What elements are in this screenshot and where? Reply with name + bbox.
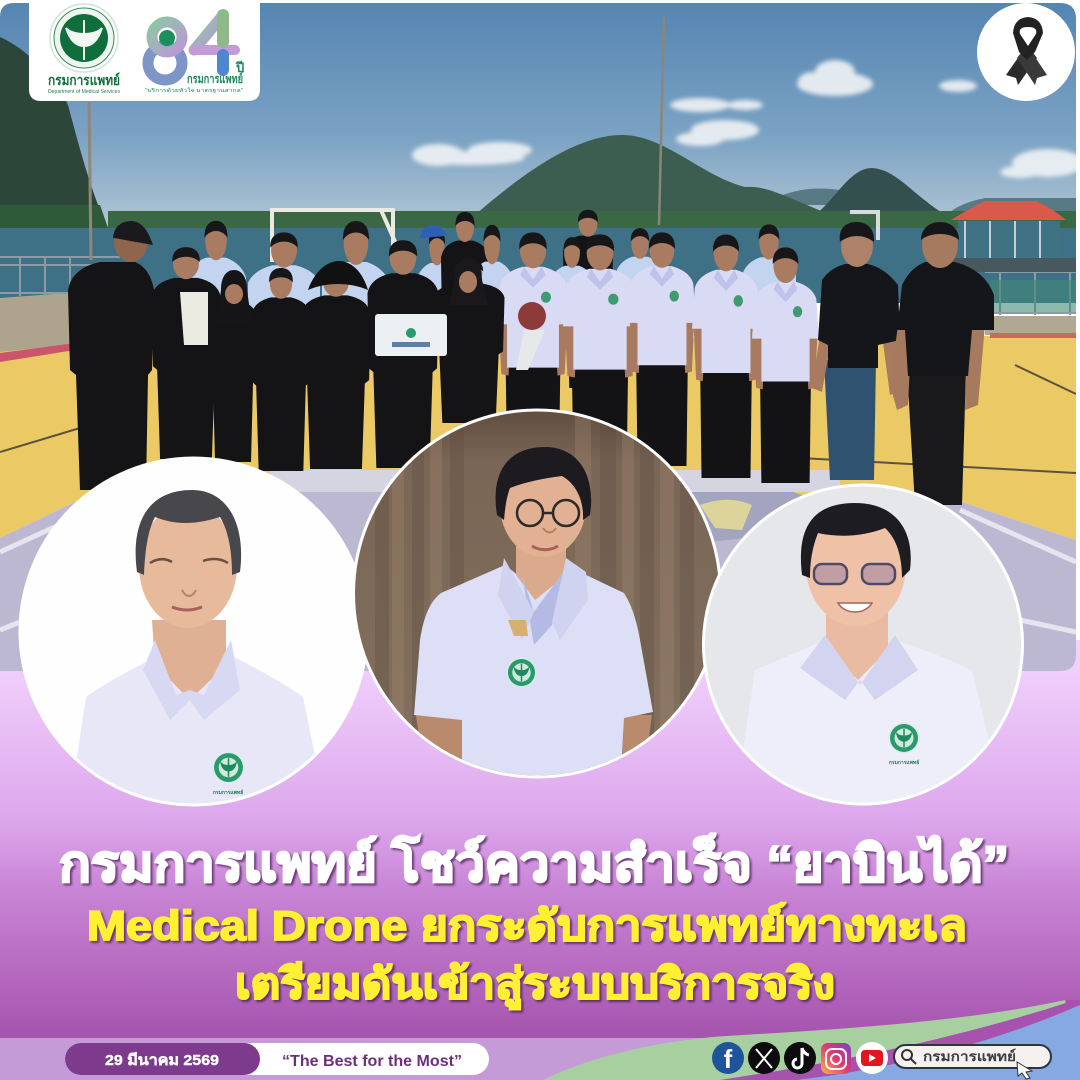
deck floor beneath group: [270, 470, 840, 492]
shirt: [740, 640, 996, 810]
curtain folds: [375, 423, 694, 764]
logo: 84 years: ปี: [235, 60, 244, 75]
icon: Facebook: f: [724, 1044, 733, 1074]
page background gradient: [0, 640, 1080, 1040]
department name: Department of Medical Services: [48, 89, 120, 95]
portrait: left official: [18, 455, 370, 810]
pin: [508, 620, 528, 636]
portrait: right official: [700, 483, 1026, 810]
mourning ribbon badge: [977, 3, 1075, 101]
icon: Facebook: [712, 1042, 744, 1074]
logo: 84 years: “บริการด้วยหัวใจ มาตรฐานสากล”: [145, 87, 243, 94]
icon: Ministry of Public Health seal: [50, 4, 118, 72]
icon: cursor: [1017, 1062, 1032, 1079]
man with black cap: [68, 221, 154, 490]
yellow deck: [0, 335, 1076, 540]
search bar: [894, 1045, 1051, 1079]
helipad lilac: [0, 480, 1076, 671]
department name: [48, 72, 120, 95]
footer band: [0, 1000, 1080, 1080]
shirt: [77, 657, 314, 804]
date and slogan pill: [65, 1043, 489, 1075]
search bar: กรมการแพทย์: [923, 1048, 1016, 1064]
back row of people: [191, 210, 796, 388]
clouds: [412, 60, 1080, 178]
sea: [0, 228, 1080, 303]
icon: X: [748, 1042, 780, 1074]
man with black polo and jeans: [812, 222, 902, 480]
blue wave: [797, 1005, 1080, 1080]
department name: กรมการแพทย์: [48, 72, 120, 88]
bouquet: [516, 302, 546, 370]
front row: black clothes: [68, 221, 505, 490]
purple wave: [720, 1000, 1080, 1080]
poles and goal: [659, 16, 664, 225]
man with black polo and trousers: [890, 222, 994, 505]
white medical box: [375, 314, 447, 356]
tree line: [108, 211, 1076, 228]
social icons: [712, 1042, 888, 1074]
portrait: left official: กรมการแพทย์: [213, 789, 243, 796]
mountains: [783, 188, 1076, 211]
logo: 84 years: [145, 15, 244, 94]
purple wedge above the band: [713, 1000, 1080, 1038]
shirt: [414, 565, 653, 790]
headline: [59, 833, 1009, 1010]
portrait: right official: กรมการแพทย์: [889, 759, 919, 766]
front row: white shirts: [497, 232, 819, 483]
icon: black ribbon: [1006, 17, 1047, 85]
arms: [416, 715, 652, 760]
red roof pavilion: [951, 201, 1066, 220]
icon: YouTube: [856, 1042, 888, 1074]
date: 29 มีนาคม 2569: [105, 1052, 219, 1069]
slogan: “The Best for the Most”: [282, 1053, 462, 1070]
portrait: center official: [350, 405, 725, 790]
logo panel: [29, 3, 260, 101]
icon: Instagram: [821, 1043, 851, 1074]
railing: [0, 257, 1076, 315]
headline line 3: เตรียมดันเข้าสู่ระบบบริการจริง: [235, 960, 835, 1010]
pier left: [0, 294, 70, 352]
group photo at the pier: [0, 3, 1080, 671]
headline line 2: Medical Drone ยกระดับการแพทย์ทางทะเล: [87, 902, 967, 949]
blue cap: [420, 225, 446, 238]
headline line 1: กรมการแพทย์ โชว์ความสำเร็จ “ยาบินได้”: [59, 833, 1009, 892]
green wave: [543, 1000, 1066, 1080]
cartoon on helipad: [700, 500, 752, 530]
icon: TikTok: [784, 1042, 816, 1074]
logo: 84 years: กรมการแพทย์: [187, 72, 243, 86]
face: [150, 559, 228, 563]
